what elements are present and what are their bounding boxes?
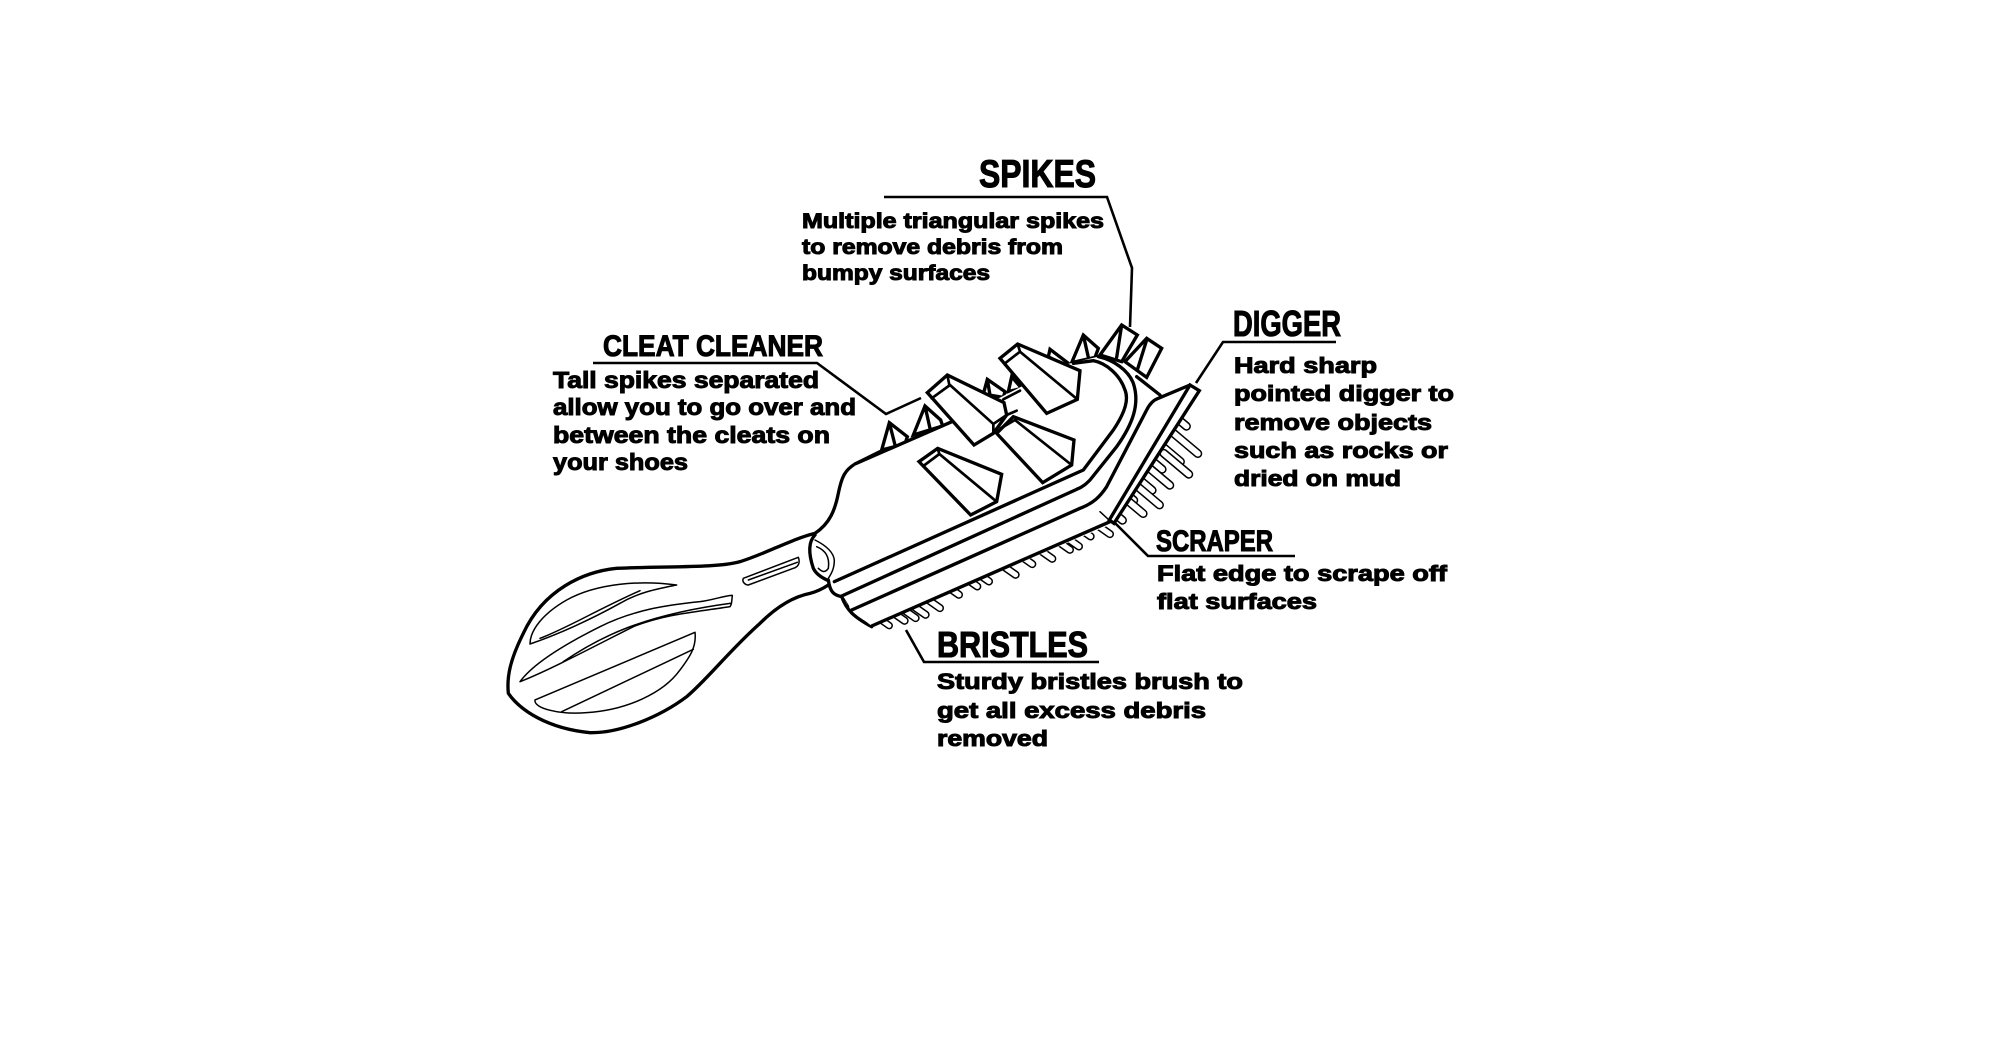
bristles: side row	[1092, 400, 1203, 525]
cleat cleaner leader line	[593, 363, 921, 414]
callout: digger	[1196, 303, 1454, 491]
handle small slot	[743, 557, 799, 585]
scraper description: flat surfaces	[1157, 589, 1317, 614]
spikes description	[802, 210, 1104, 285]
callout: scraper	[1115, 523, 1448, 614]
head top edge	[855, 417, 963, 464]
illustration: cleat cleaner tool	[508, 325, 1203, 733]
spike block upper left	[927, 375, 1007, 445]
spikes heading: SPIKES	[979, 153, 1096, 196]
lower rail	[852, 385, 1190, 610]
spikes leader line	[884, 197, 1132, 327]
spikes description: Multiple triangular spikes	[802, 210, 1104, 233]
head left end	[828, 580, 872, 627]
scraper heading: SCRAPER	[1156, 525, 1273, 558]
brush head	[834, 325, 1203, 630]
callout: spikes	[802, 153, 1132, 327]
scraper tick	[1100, 512, 1113, 524]
bristles heading: BRISTLES	[937, 624, 1088, 665]
bristles description	[937, 669, 1243, 751]
handle slot 1	[530, 583, 677, 644]
digger leader line	[1196, 342, 1336, 383]
head body fill and top edge	[834, 357, 1199, 626]
neck collar	[810, 535, 828, 581]
back row small spikes	[882, 325, 1162, 450]
digger description: dried on mud	[1234, 466, 1401, 491]
scraper edge	[1109, 385, 1199, 523]
callout: bristles	[906, 624, 1243, 751]
upper rail	[834, 361, 1126, 582]
digger description: such as rocks or	[1234, 438, 1449, 463]
spikes description: to remove debris from	[802, 236, 1063, 259]
bristles description: get all excess debris	[937, 698, 1206, 723]
scraper description	[1157, 561, 1448, 614]
handle slot 3	[535, 632, 695, 713]
digger description: pointed digger to	[1234, 381, 1454, 406]
cleat cleaner description: your shoes	[553, 449, 688, 475]
bristles description: removed	[937, 726, 1048, 751]
spikes description: bumpy surfaces	[802, 262, 990, 285]
bristles description: Sturdy bristles brush to	[937, 669, 1243, 694]
bristles: bottom row	[874, 522, 1115, 630]
spike block top right	[1000, 344, 1080, 413]
back shoulder	[1137, 377, 1160, 395]
digger description: Hard sharp	[1234, 353, 1377, 378]
tool handle	[508, 452, 880, 733]
neck to body edge	[815, 452, 880, 533]
digger description: remove objects	[1234, 410, 1432, 435]
digger description	[1234, 353, 1454, 491]
cleat cleaner description: Tall spikes separated	[553, 367, 819, 393]
handle slot 2	[520, 595, 732, 682]
bristles leader line	[906, 630, 1099, 662]
cleat cleaner description: allow you to go over and	[553, 394, 856, 420]
scraper leader line	[1115, 523, 1295, 556]
callout: cleat cleaner	[553, 330, 921, 475]
scraper description: Flat edge to scrape off	[1157, 561, 1448, 586]
cleat cleaner description	[553, 367, 856, 475]
head bottom edge	[872, 522, 1110, 626]
spike connector	[1003, 391, 1020, 415]
digger heading: DIGGER	[1233, 303, 1341, 344]
spike block lower left	[919, 448, 1002, 515]
neck collar inner	[815, 540, 834, 578]
spike block middle right	[997, 417, 1074, 483]
cleat cleaner heading: CLEAT CLEANER	[603, 330, 823, 363]
handle outline	[508, 533, 828, 733]
middle rail	[842, 357, 1136, 596]
cleat cleaner description: between the cleats on	[553, 422, 830, 448]
